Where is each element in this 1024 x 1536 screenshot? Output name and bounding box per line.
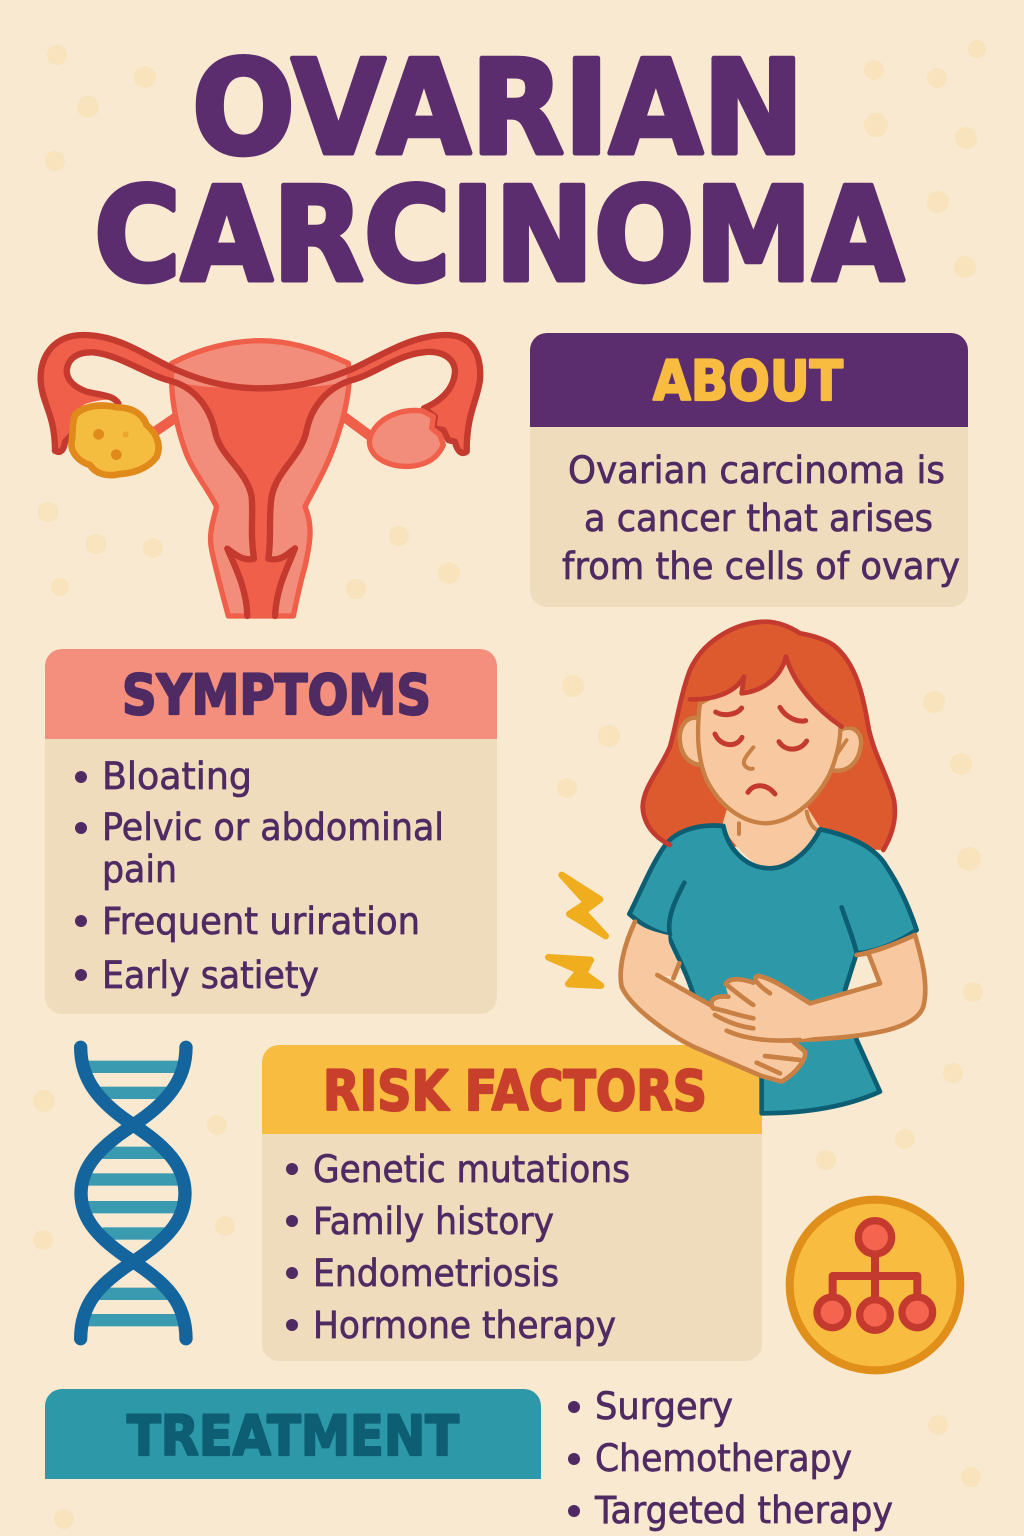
tumour on left ovary — [71, 406, 159, 475]
about text: a cancer that arises — [584, 497, 933, 540]
illustration: woman with abdominal pain — [621, 622, 925, 1113]
right arm — [757, 935, 925, 1040]
right ovary — [369, 410, 443, 466]
fringe — [690, 622, 868, 727]
risk factors list: Hormone therapy — [313, 1304, 616, 1347]
hair — [643, 622, 895, 850]
about heading: ABOUT — [653, 349, 843, 413]
left arm and lower hand — [621, 922, 805, 1082]
treatment list: Chemotherapy — [595, 1437, 852, 1480]
panel: treatment header — [45, 1389, 541, 1479]
symptoms list: Frequent uriration — [102, 900, 420, 943]
risk factors list — [286, 1148, 630, 1347]
about header — [530, 333, 968, 427]
title — [94, 32, 904, 311]
about text — [562, 449, 960, 588]
shirt — [629, 825, 917, 1113]
treatment list — [568, 1385, 893, 1532]
symptoms list: Early satiety — [102, 954, 319, 997]
risk factors list: Family history — [313, 1200, 554, 1243]
treatment list: Surgery — [595, 1385, 733, 1428]
face — [698, 657, 840, 823]
symptoms list — [75, 755, 444, 997]
risk factors list: Endometriosis — [313, 1252, 559, 1295]
about text: Ovarian carcinoma is — [568, 449, 945, 492]
symptoms heading: SYMPTOMS — [122, 663, 431, 727]
risk factors list: Genetic mutations — [313, 1148, 630, 1191]
title: OVARIAN — [192, 32, 804, 184]
icon: uterus and ovaries illustration — [41, 335, 480, 616]
left ear — [680, 718, 703, 765]
icon: lightning bolts — [548, 875, 606, 986]
symptoms list: Pelvic or abdominal — [102, 806, 444, 849]
hair outlines — [643, 622, 895, 850]
panel: about — [530, 333, 968, 607]
ligaments — [155, 413, 373, 438]
uterine cavity fill — [170, 381, 350, 616]
treatment list: Targeted therapy — [594, 1489, 893, 1532]
icon: dna helix — [81, 1047, 186, 1339]
right fallopian tube fill — [350, 335, 480, 453]
dark outlines of tubes and cavity — [41, 335, 480, 616]
symptoms list: Bloating — [102, 755, 252, 798]
icon: family tree medallion — [790, 1200, 960, 1370]
neck — [722, 807, 822, 868]
face features — [715, 707, 807, 794]
right ear — [832, 728, 861, 771]
symptoms header — [45, 649, 497, 739]
symptoms list: pain — [102, 848, 177, 891]
shirt fold lines — [669, 883, 857, 953]
left fallopian tube fill — [41, 335, 177, 452]
risk factors heading: RISK FACTORS — [323, 1059, 707, 1123]
uterus body — [171, 341, 349, 616]
upper hand — [711, 977, 817, 1042]
title: CARCINOMA — [94, 159, 904, 311]
about text: from the cells of ovary — [562, 545, 960, 588]
risk factors header — [262, 1045, 762, 1134]
panel: symptoms — [45, 649, 497, 1014]
panel: risk factors — [262, 1045, 762, 1361]
treatment heading: TREATMENT — [127, 1404, 459, 1468]
